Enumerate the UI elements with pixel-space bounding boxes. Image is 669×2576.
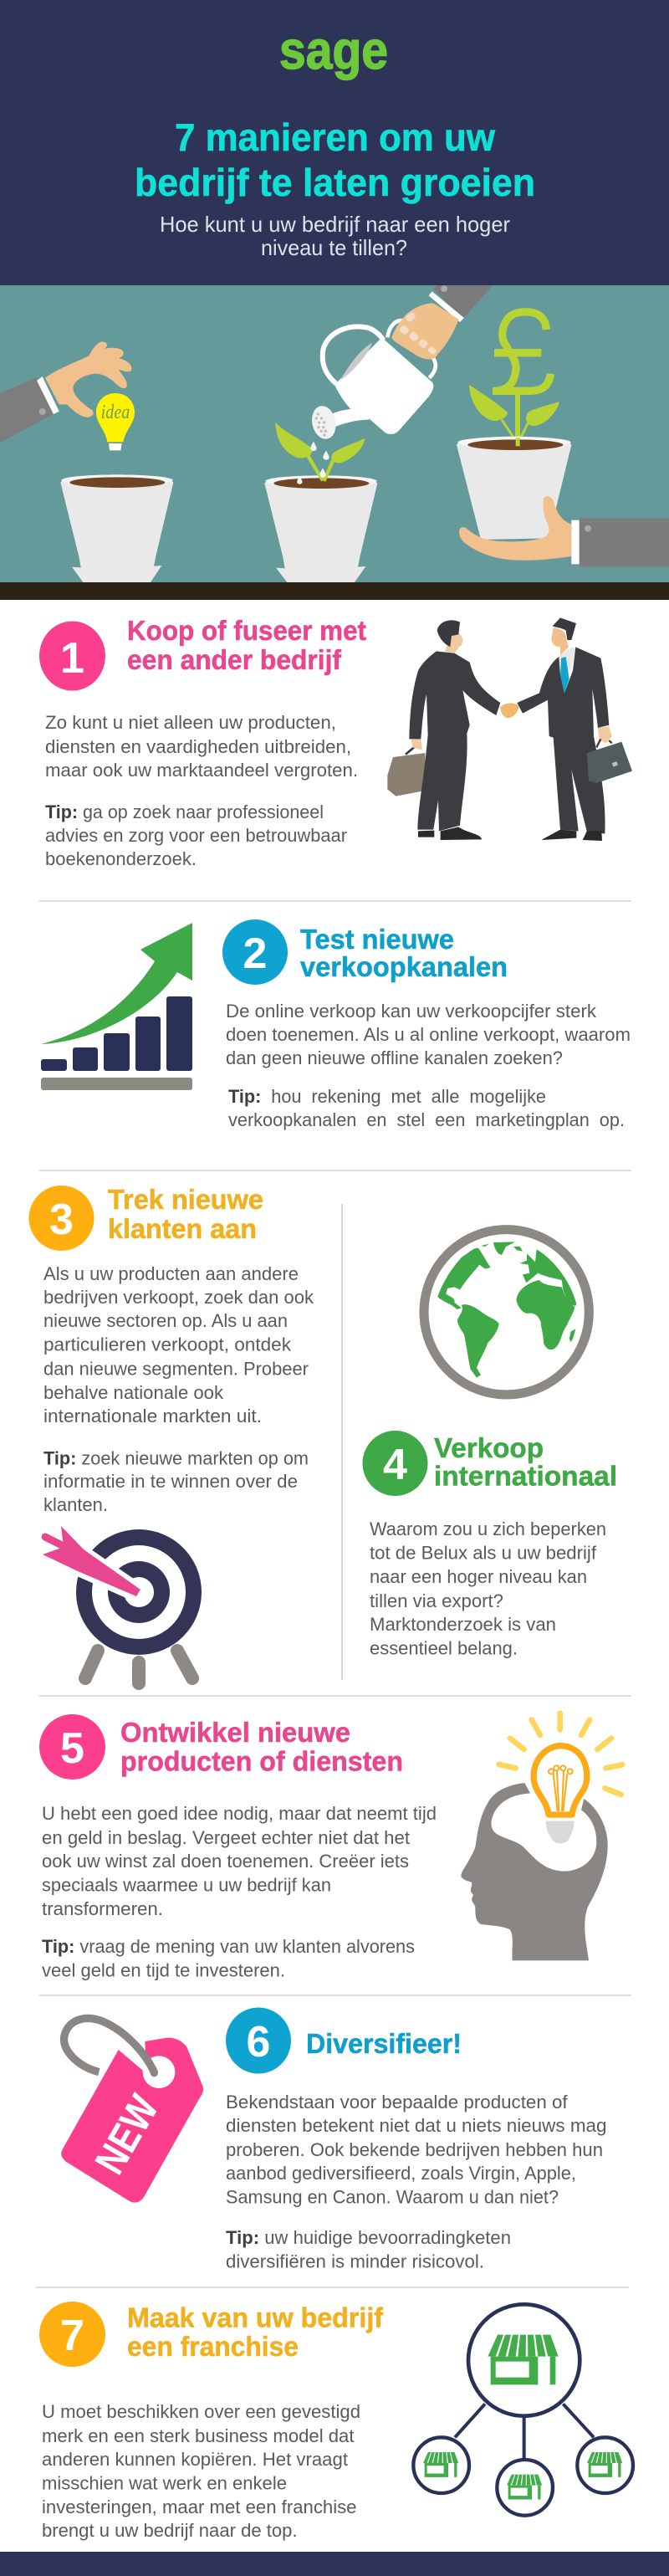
- text: step 1 tip: [45, 801, 347, 869]
- text: step 3 body: nieuwe sectoren op. Als u aan: [43, 1310, 288, 1331]
- text: step 1 tip: Tip: ga op zoek naar professioneel: [45, 801, 324, 822]
- text: step 7 body: [42, 2401, 360, 2541]
- text: step 1 tip: advies en zorg voor een betrouwbaar: [45, 825, 347, 846]
- text: step 7 body: merk en een sterk business model dat: [42, 2425, 355, 2446]
- title: bedrijf te laten groeien: [135, 161, 535, 204]
- badge: number 7: 7: [60, 2312, 84, 2360]
- heading: step 6: Diversifieer!: [306, 2028, 462, 2059]
- icon: head with light bulb: [461, 1713, 622, 1960]
- text: step 1 body: [45, 712, 358, 781]
- text: step 6 body: Bekendstaan voor bepaalde producten of: [226, 2092, 568, 2113]
- text: step 6 body: [226, 2092, 607, 2207]
- text: step 3 body: [43, 1263, 314, 1426]
- text: step 5 tip: [42, 1936, 415, 1981]
- text: step 3 body: particulieren verkoopt, ontdek: [43, 1334, 292, 1355]
- text: step 5 body: U hebt een goed idee nodig, maar dat neemt tijd: [42, 1803, 437, 1824]
- icon: franchise network of stores: [413, 2304, 633, 2516]
- text: step 6 body: aanbod gediversifieerd, zoals Virgin, Apple,: [226, 2163, 576, 2184]
- heading: step 2: [300, 924, 508, 982]
- subtitle: [160, 212, 510, 260]
- text: step 6 tip: Tip: uw huidige bevoorradingketen: [226, 2227, 511, 2248]
- text: step 3 body: behalve nationale ook: [43, 1382, 224, 1403]
- text: step 5 body: en geld in beslag. Vergeet echter niet dat het: [42, 1827, 410, 1848]
- text: step 2 tip: Tip: hou rekening met alle mogelijke: [228, 1086, 546, 1107]
- text: step 4 body: essentieel belang.: [370, 1638, 518, 1659]
- heading: step 4: [434, 1432, 617, 1491]
- text: step 5 body: [42, 1803, 437, 1919]
- text: step 2 body: doen toenemen. Als u al online verkoopt, waarom: [226, 1024, 631, 1045]
- text: step 7 body: U moet beschikken over een gevestigd: [42, 2401, 360, 2422]
- illustration: two businessmen shaking hands: [387, 617, 632, 841]
- badge: number 4: 4: [383, 1441, 407, 1489]
- icon: target with arrow: [43, 1526, 202, 1683]
- heading: step 1: een ander bedrijf: [127, 644, 342, 675]
- text: step 4 body: Waarom zou u zich beperken: [370, 1518, 606, 1539]
- text: step 3 body: bedrijven verkoopt, zoek dan ook: [43, 1287, 314, 1308]
- text: step 4 body: tillen via export?: [370, 1590, 503, 1611]
- heading: step 1: Koop of fuseer met: [127, 615, 366, 646]
- text: step 3 tip: [43, 1448, 309, 1515]
- badge: number 4: [363, 1431, 428, 1496]
- text: step 1 body: diensten en vaardigheden uitbreiden,: [45, 736, 351, 757]
- text: step 4 body: tot de Belux als u uw bedrijf: [370, 1543, 597, 1563]
- text: step 6 body: diensten betekent niet dat u niets nieuws mag: [226, 2115, 607, 2136]
- text: step 3 body: Als u uw producten aan andere: [43, 1263, 299, 1284]
- heading: step 7: [127, 2302, 384, 2362]
- panel: header: [0, 0, 669, 285]
- icon: NEW price tag: [61, 2018, 203, 2203]
- panel: step 7: [39, 2302, 633, 2541]
- logo: sage: sage: [279, 20, 388, 80]
- text: step 4 body: naar een hoger niveau kan: [370, 1566, 587, 1587]
- panel: step 1: [39, 615, 632, 869]
- icon: pound plant in held pot: [457, 312, 669, 566]
- panel: hero illustration: [0, 285, 669, 600]
- heading: step 2: verkoopkanalen: [300, 951, 508, 982]
- panel: step 3: [28, 1184, 314, 1683]
- text: step 5 body: ook uw winst zal doen toenemen. Creëer iets: [42, 1851, 409, 1872]
- heading: step 3: [108, 1184, 263, 1244]
- footer band: [0, 2552, 669, 2576]
- text: step 5 body: transformeren.: [42, 1898, 163, 1919]
- badge: number 3: [28, 1186, 94, 1251]
- badge: number 6: 6: [247, 2018, 270, 2066]
- panel: step 6: [61, 2008, 607, 2272]
- badge: number 1: [39, 621, 105, 691]
- text: step 7 body: investeringen, maar met een franchise: [42, 2497, 357, 2517]
- heading: step 4: Verkoop: [434, 1432, 544, 1463]
- text: step 5 tip: veel geld en tijd te investeren.: [42, 1959, 285, 1981]
- heading: step 5: producten of diensten: [120, 1746, 403, 1777]
- text: step 1 body: maar ook uw marktaandeel vergroten.: [45, 760, 358, 781]
- icon: pot two with seedling: [264, 475, 377, 582]
- heading: step 7: een franchise: [127, 2331, 299, 2362]
- subtitle: Hoe kunt u uw bedrijf naar een hoger: [160, 212, 510, 237]
- icon: globe: [424, 1230, 589, 1395]
- text: step 1 body: Zo kunt u niet alleen uw producten,: [45, 712, 336, 733]
- chart: growing bars with arrow: [41, 923, 192, 1090]
- badge: number 1: 1: [60, 634, 84, 683]
- panel: step 4: [363, 1230, 617, 1659]
- badge: number 5: [39, 1714, 105, 1780]
- text: step 2 tip: verkoopkanalen en stel een marketingplan op.: [228, 1109, 625, 1130]
- text: step 3 body: dan nieuwe segmenten. Probeer: [43, 1359, 309, 1379]
- icon: seedling and watering can: [275, 285, 493, 484]
- heading: step 2: Test nieuwe: [300, 924, 454, 955]
- text: step 2 body: dan geen nieuwe offline kanalen zoeken?: [226, 1047, 563, 1068]
- text: step 7 body: misschien wat werk en enkele: [42, 2473, 287, 2493]
- text: step 4 body: Marktonderzoek is van: [370, 1614, 556, 1635]
- text: step 6 body: proberen. Ook bekende bedrijven hebben hun: [226, 2139, 603, 2160]
- text: step 2 body: De online verkoop kan uw verkoopcijfer sterk: [226, 1001, 597, 1022]
- text: step 3 tip: klanten.: [43, 1494, 108, 1515]
- heading: step 3: Trek nieuwe: [108, 1184, 263, 1215]
- text: step 2 body: [226, 1001, 631, 1068]
- badge: number 3: 3: [49, 1196, 74, 1244]
- panel: step 2: [41, 919, 631, 1130]
- text: step 7 body: anderen kunnen kopiëren. Het vraagt: [42, 2449, 348, 2470]
- icon: pot one: [60, 474, 173, 582]
- title: [135, 115, 535, 204]
- badge: number 6: [226, 2008, 291, 2073]
- heading: step 5: Ontwikkel nieuwe: [120, 1717, 350, 1748]
- text: step 6 tip: diversifiëren is minder risicovol.: [226, 2251, 484, 2272]
- badge: number 2: 2: [243, 930, 267, 978]
- badge: number 5: 5: [60, 1724, 84, 1773]
- heading: step 5: [120, 1717, 403, 1777]
- icon: NEW price tag: NEW: [86, 2087, 168, 2182]
- heading: step 7: Maak van uw bedrijf: [127, 2302, 384, 2333]
- text: step 5 tip: Tip: vraag de mening van uw klanten alvorens: [42, 1936, 415, 1957]
- icon: left hand holding idea bulb: idea: [101, 402, 130, 423]
- text: step 6 tip: [226, 2227, 511, 2272]
- badge: number 2: [222, 919, 288, 985]
- text: step 6 body: Samsung en Canon. Waarom u dan niet?: [226, 2187, 559, 2207]
- text: step 7 body: brengt u uw bedrijf naar de top.: [42, 2520, 298, 2541]
- subtitle: niveau te tillen?: [261, 235, 407, 260]
- title: 7 manieren om uw: [175, 115, 495, 159]
- text: step 3 tip: Tip: zoek nieuwe markten op om: [43, 1448, 309, 1469]
- heading: step 3: klanten aan: [108, 1213, 257, 1244]
- text: step 5 body: speciaals waarmee u uw bedrijf kan: [42, 1874, 331, 1896]
- text: step 4 body: [370, 1518, 606, 1659]
- badge: number 7: [39, 2302, 105, 2367]
- text: step 3 tip: informatie in te winnen over de: [43, 1471, 298, 1492]
- text: step 2 tip: [228, 1086, 625, 1130]
- heading: step 1: [127, 615, 366, 675]
- text: step 1 tip: boekenonderzoek.: [45, 848, 197, 869]
- text: step 3 body: internationale markten uit.: [43, 1406, 262, 1426]
- heading: step 4: internationaal: [434, 1461, 617, 1491]
- panel: step 5: [39, 1713, 622, 1981]
- icon: left hand holding idea bulb: [0, 341, 135, 450]
